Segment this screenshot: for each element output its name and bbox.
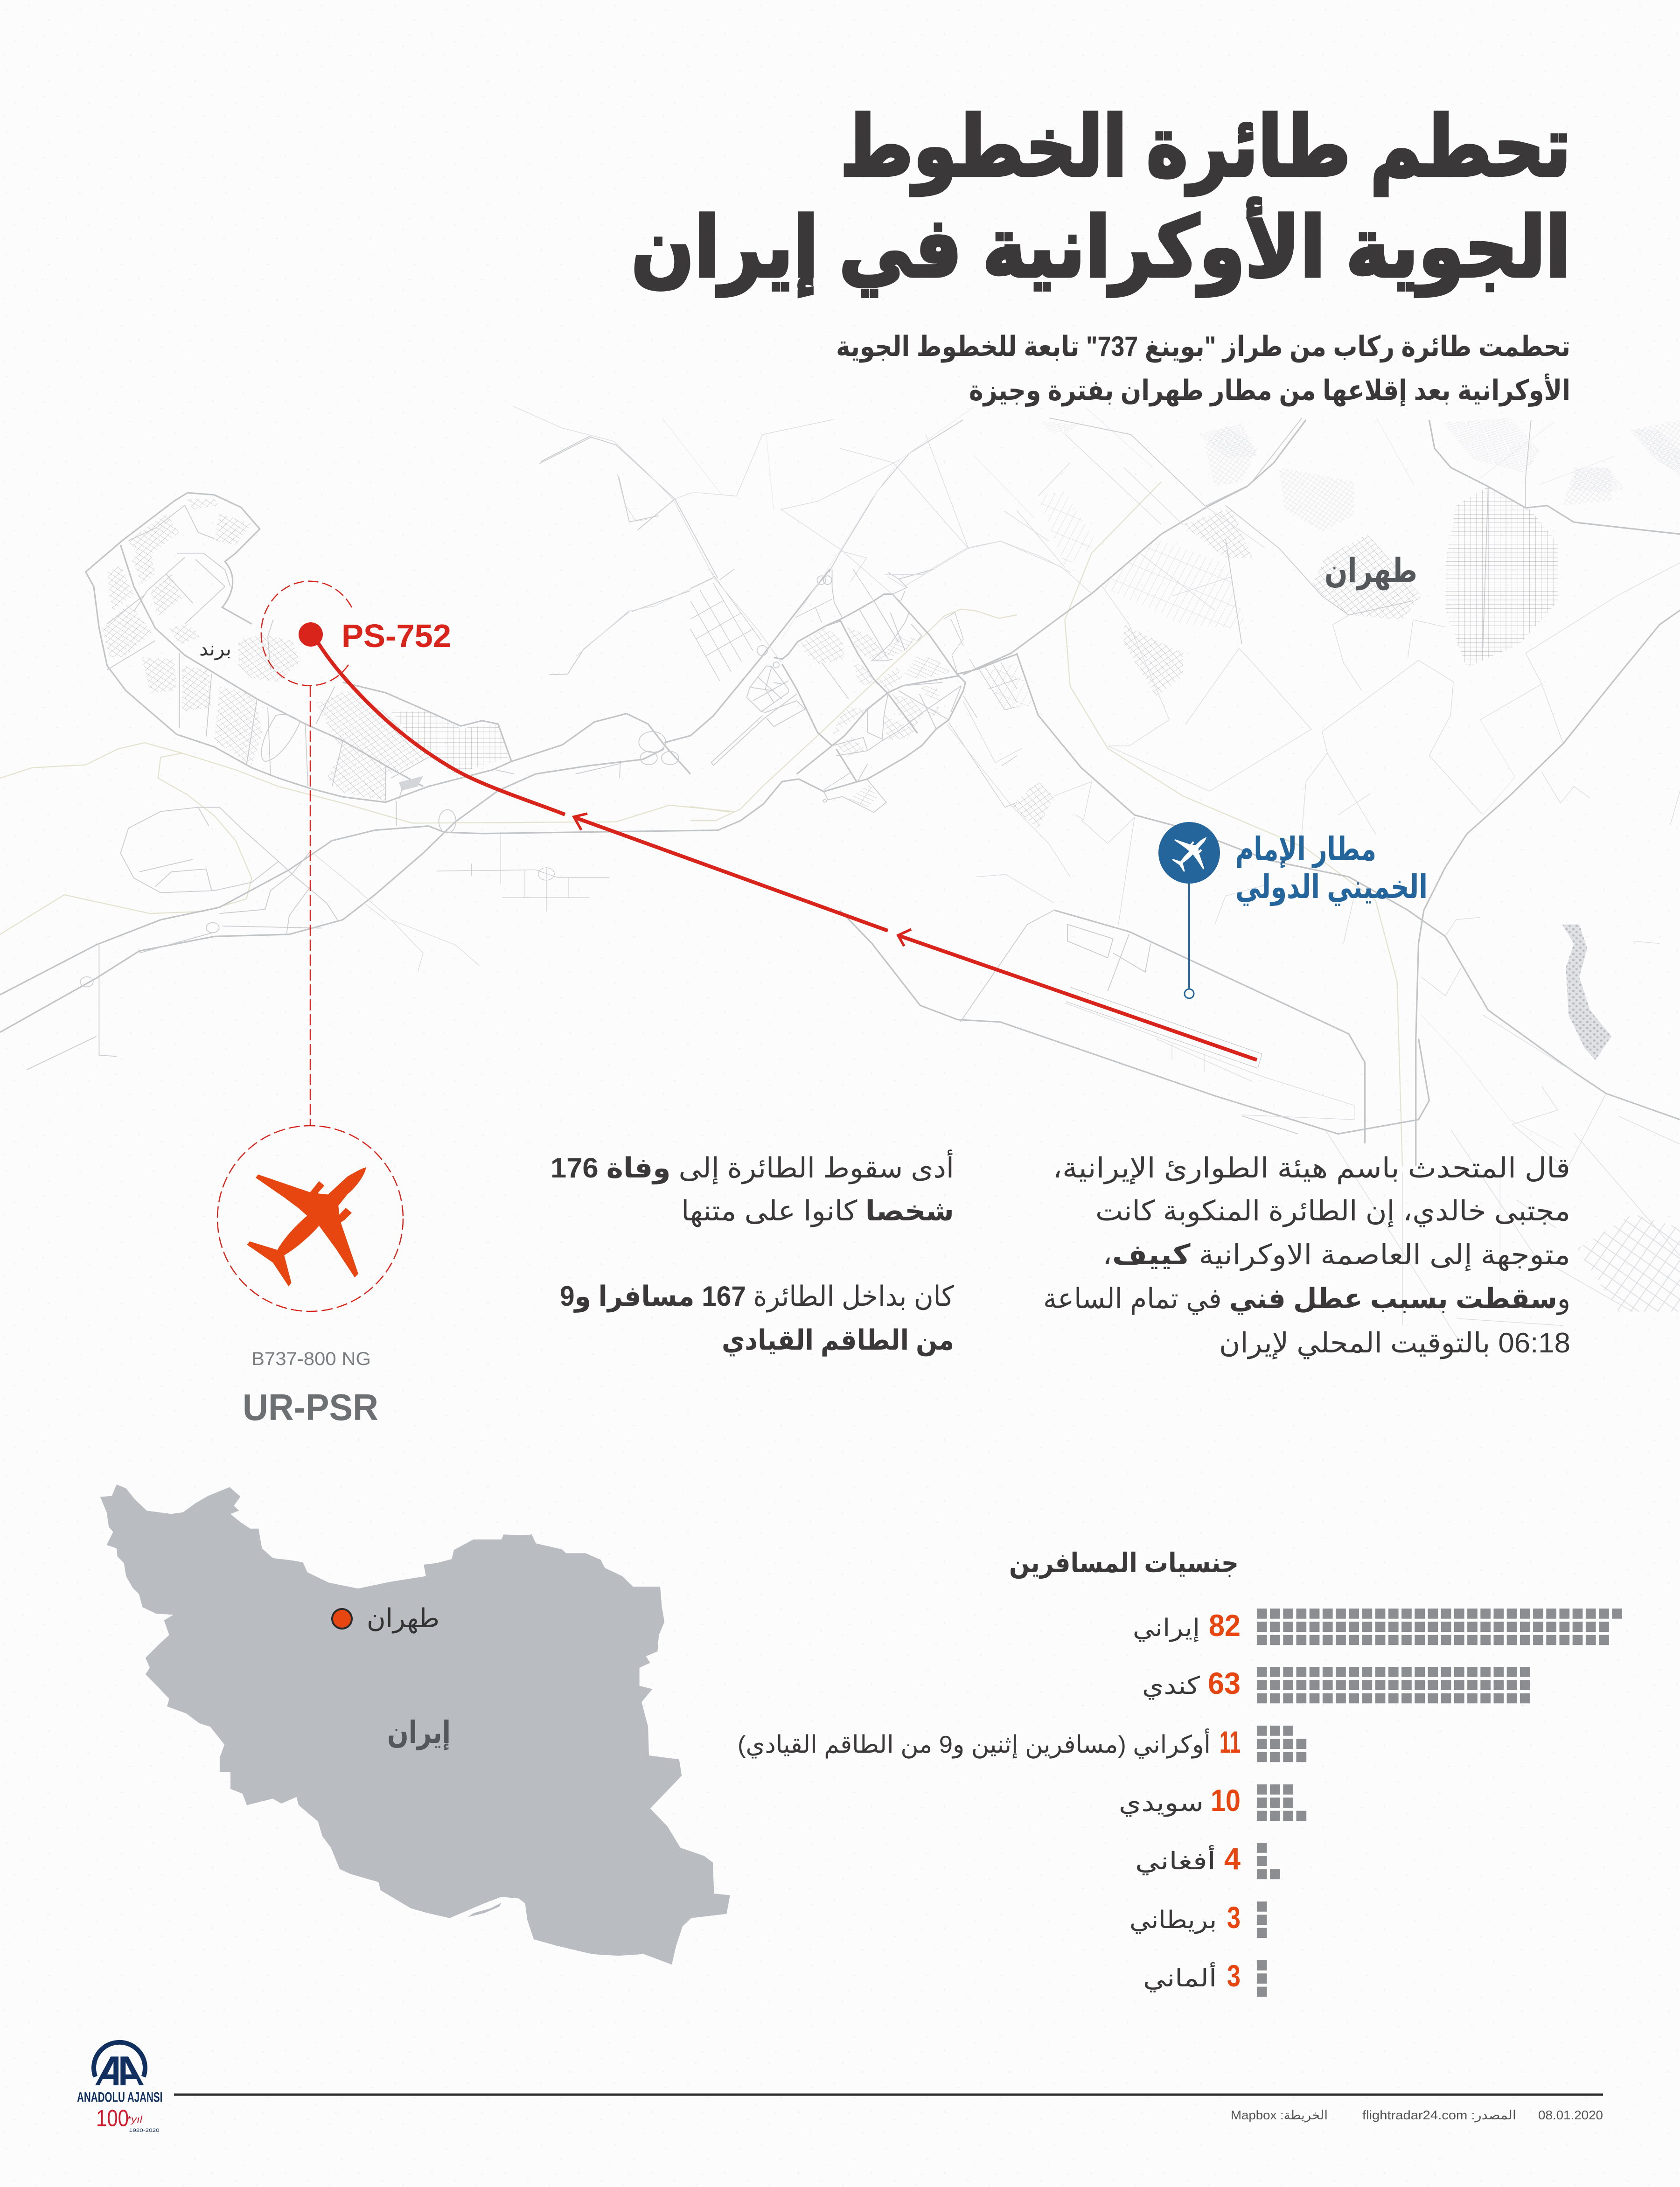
row: German 3: 3 <box>1227 1958 1241 1993</box>
icon: plane <box>247 1167 366 1287</box>
footer: date and sources: الخريطة: Mapbox <box>1231 2108 1328 2123</box>
icon: airport plane <box>1172 837 1206 872</box>
row: Afghan 4: أفغاني <box>1135 1845 1216 1875</box>
row: Ukrainian 11: 11 <box>1220 1725 1241 1759</box>
row: Ukrainian 11: أوكراني (مسافرين إثنين و9 من الطاقم القيادي) <box>738 1728 1211 1759</box>
marker: Tehran <box>332 1609 352 1629</box>
text block: official statement: قال المتحدث باسم هيئة الطوارئ الإيرانية، <box>1053 1152 1570 1184</box>
nationalities chart <box>738 1608 1623 1993</box>
subtitle <box>836 331 1570 407</box>
footer: date and sources <box>1231 2108 1603 2123</box>
text block: official statement: مجتبى خالدي، إن الطائرة المنكوبة كانت <box>1095 1195 1570 1227</box>
text block: casualties: من الطاقم القيادي <box>722 1324 954 1357</box>
aircraft circle with plane icon <box>217 1126 403 1311</box>
row: Afghan 4: 4 <box>1224 1841 1241 1876</box>
text block: official statement: 06:18 بالتوقيت المحلي لإيران <box>1219 1327 1570 1359</box>
text block: official statement: وسقطت بسبب عطل فني في تمام الساعة <box>1043 1283 1570 1315</box>
map: faint lower-right roads <box>1325 1116 1680 1339</box>
row: British 3: 3 <box>1227 1900 1241 1935</box>
title: تحطم طائرة الخطوط <box>840 100 1571 196</box>
title: الجوية الأوكرانية في إيران <box>631 198 1571 297</box>
title <box>631 100 1571 297</box>
text block: casualties: كان بداخل الطائرة 167 مسافرا و9 <box>560 1281 954 1313</box>
row: German 3: ألماني <box>1143 1962 1217 1992</box>
map label: Tehran: طهران <box>1324 552 1417 591</box>
row: Iranian 82 <box>1133 1608 1623 1643</box>
logo: Anadolu Agency: 1920-2020 <box>129 2128 160 2133</box>
row: Canadian 63: كندي <box>1142 1672 1200 1700</box>
text block: casualties: شخصا كانوا على متنها <box>681 1195 954 1227</box>
row: Swedish 10: 10 <box>1211 1783 1241 1818</box>
aircraft registration: UR-PSR <box>243 1386 378 1428</box>
row: German 3 <box>1143 1958 1267 1993</box>
text block: official statement <box>1043 1152 1570 1359</box>
road map of western Tehran <box>0 406 1680 1339</box>
dashed connector to aircraft <box>310 686 311 1126</box>
subtitle: الأوكرانية بعد إقلاعها من مطار طهران بفترة وجيزة <box>969 373 1570 407</box>
nationalities heading: جنسيات المسافرين <box>1009 1548 1239 1579</box>
row: Canadian 63: 63 <box>1208 1666 1241 1700</box>
row: Swedish 10 <box>1119 1783 1306 1818</box>
map label: Barand: برند <box>199 638 231 660</box>
text block: casualties: أدى سقوط الطائرة إلى وفاة 176 <box>551 1149 954 1184</box>
logo: Anadolu Agency: *yıl <box>127 2114 143 2125</box>
airport marker <box>1158 822 1220 998</box>
row: Ukrainian 11 <box>738 1725 1306 1759</box>
text block: official statement: متوجهة إلى العاصمة الاوكرانية كييف، <box>1102 1239 1570 1271</box>
airport name <box>1235 831 1428 906</box>
airport name: الخميني الدولي <box>1235 869 1428 906</box>
flight number label: PS-752 <box>342 618 451 654</box>
footer rule <box>174 2094 1603 2096</box>
row: British 3 <box>1129 1900 1267 1935</box>
flight path with arrows <box>316 640 1257 1060</box>
footer: date and sources: 08.01.2020 <box>1538 2108 1603 2122</box>
airport name: مطار الإمام <box>1235 831 1376 869</box>
logo: Anadolu Agency: ANADOLU AJANSI <box>77 2090 162 2105</box>
text block: casualties <box>551 1149 954 1357</box>
map: east section with Tehran suburbs and airport <box>829 420 1680 1166</box>
map of Iran <box>100 1484 730 1964</box>
map: central town <box>690 569 1017 830</box>
logo: Anadolu Agency: 100 <box>96 2105 129 2131</box>
row: Swedish 10: سويدي <box>1119 1790 1204 1817</box>
label: Iran: إيران <box>387 1715 451 1751</box>
row: Iranian 82: إيراني <box>1133 1615 1200 1642</box>
row: Iranian 82: 82 <box>1209 1608 1241 1643</box>
subtitle: تحطمت طائرة ركاب من طراز "بوينغ 737" تابعة للخطوط الجوية <box>836 331 1570 363</box>
dashed circle around crash point <box>261 581 352 686</box>
label: Tehran: طهران <box>367 1603 439 1634</box>
map: faint northern roads <box>513 406 1680 662</box>
logo: Anadolu Agency <box>77 2042 162 2133</box>
map: Barand and west section <box>0 437 734 1070</box>
row: Afghan 4 <box>1135 1841 1280 1876</box>
aircraft model: B737-800 NG <box>251 1349 371 1369</box>
crash point marker <box>299 622 323 647</box>
row: Canadian 63 <box>1142 1666 1530 1700</box>
footer: date and sources: المصدر: flightradar24.com <box>1362 2108 1516 2123</box>
row: British 3: بريطاني <box>1129 1907 1217 1934</box>
